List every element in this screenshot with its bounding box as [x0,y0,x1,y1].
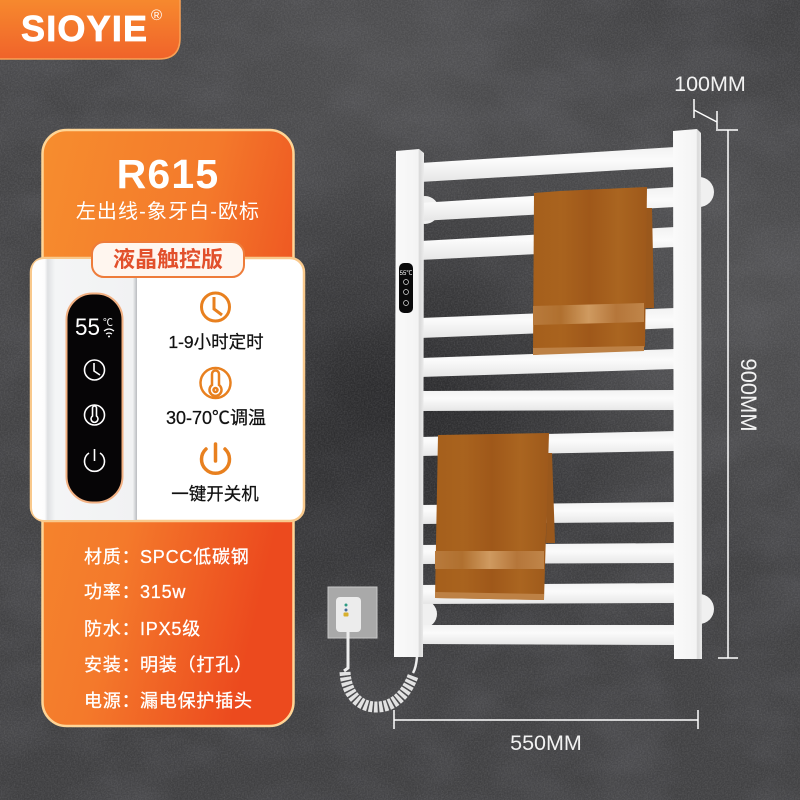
panel background [42,130,294,726]
touch display [66,294,122,502]
lower towel [435,433,555,600]
horizontal rails [420,147,675,645]
dimension: height 900MM [718,130,761,658]
feature: temperature [166,368,266,428]
coiled power cable [344,632,417,707]
spec list: 材质： [84,547,140,567]
icon: display power [85,449,105,471]
spec list: 315w [140,582,186,602]
touch display: 55 [75,314,100,341]
spec list [84,547,253,711]
towel rack [394,129,714,659]
white feature card [31,242,304,521]
spec list: 漏电保护插头 [140,691,253,711]
feature: power: 一键开关机 [171,484,259,504]
left post [394,149,424,657]
touch display: ℃ [103,318,113,329]
badge: LCD touch edition [92,242,244,277]
right post [673,129,702,659]
feature: timer: 1-9小时定时 [168,332,264,352]
dimension: depth 100MM [674,72,746,131]
spec list: 防水： [84,619,140,639]
logo tab: SIOYIE [21,8,148,49]
feature: temperature: 30-70℃调温 [166,408,266,428]
rack control panel [399,263,413,313]
icon: display clock [84,360,104,380]
spec list: 安装： [84,655,140,675]
icon: display thermometer [84,405,104,425]
panel: product specs [31,130,304,726]
logo tab [0,0,180,59]
model title: R615 [117,151,219,197]
logo tab: ® [151,7,162,24]
control panel photo strip [32,259,137,520]
dimension: height 900MM: 900MM [736,358,761,432]
dimension: depth 100MM: 100MM [674,72,746,96]
rack control panel: 55℃ [400,270,412,277]
feature: timer [168,293,264,352]
upper towel [533,187,654,355]
spec list: 电源： [84,691,140,711]
spec list: IPX5级 [140,619,201,639]
feature: power [171,444,259,504]
spec list: SPCC低碳钢 [140,547,250,567]
dimension: width 550MM: 550MM [510,731,582,755]
wall socket and plug [328,587,377,638]
dimension: width 550MM [394,710,698,755]
spec list: 功率： [84,582,140,602]
wall brackets [409,177,714,628]
spec list: 明装（打孔） [140,655,253,675]
model subtitle: 左出线-象牙白-欧标 [76,200,260,223]
badge: LCD touch edition: 液晶触控版 [113,247,223,272]
